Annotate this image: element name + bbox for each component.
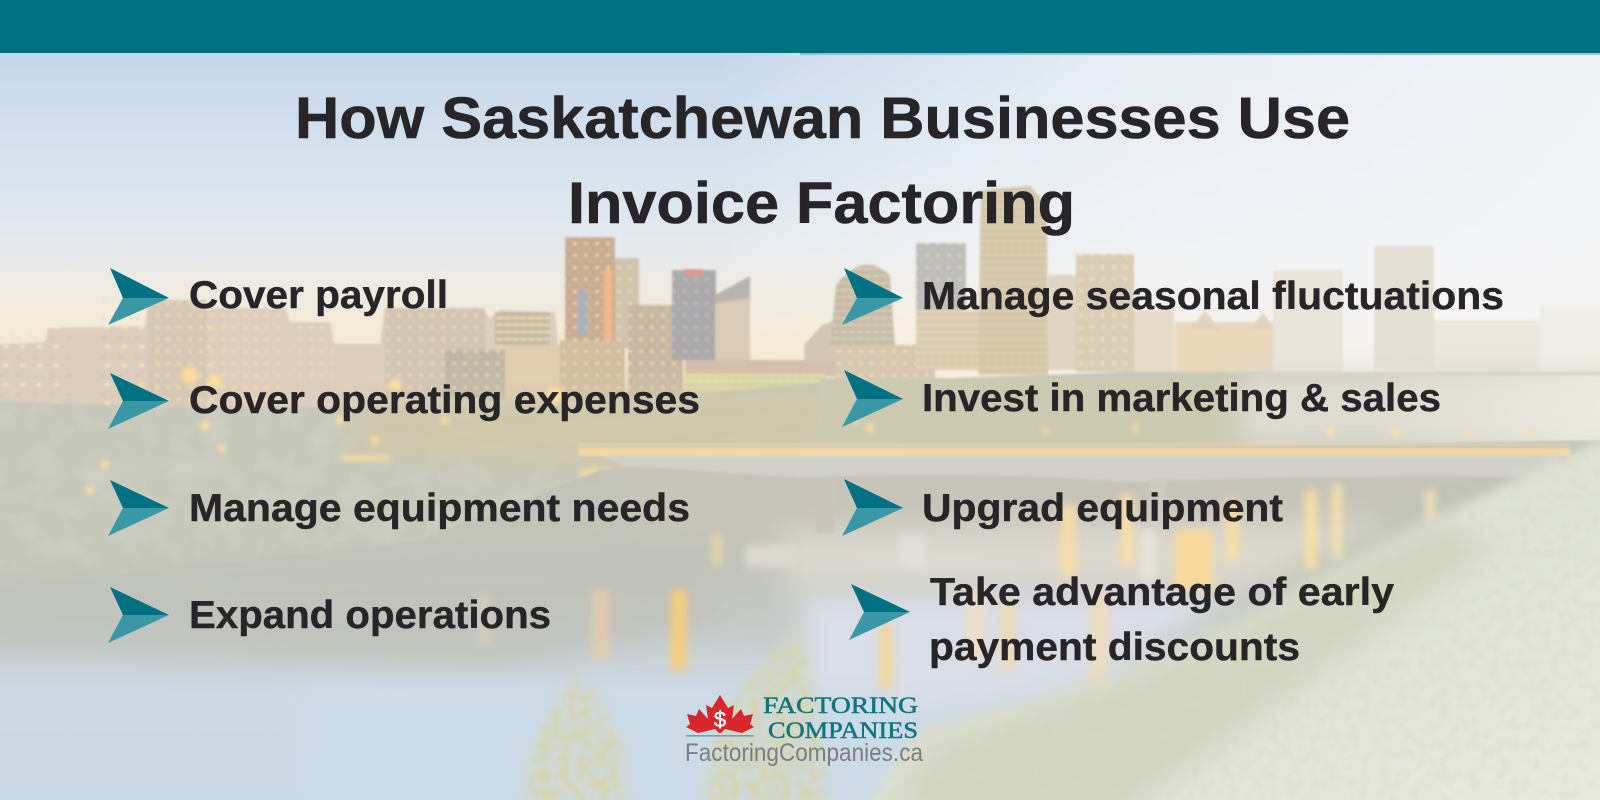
icon: red maple leaf with dollar sign: $ [714, 707, 726, 732]
skyline buildings [0, 186, 1600, 420]
river [0, 440, 1600, 800]
item: upgrade equipment: Upgrad equipment [922, 487, 1283, 530]
top teal bar [0, 0, 1600, 55]
arrow icon: manage equipment needs [108, 480, 169, 536]
bridge [578, 444, 1570, 533]
item: cover payroll: Cover payroll [189, 274, 448, 317]
item: expand operations: Expand operations [189, 594, 551, 637]
sky [0, 40, 1600, 410]
arrow icon: invest in marketing [842, 370, 903, 427]
arrow icon: upgrade equipment [842, 479, 903, 536]
item: early payment discounts: Take advantage of early [930, 571, 1394, 614]
foreground shrubs [516, 624, 834, 800]
grassy foreground bank [840, 430, 1600, 800]
arrow icon: cover payroll [108, 268, 169, 325]
item: early payment discounts [929, 571, 1394, 669]
item: early payment discounts: payment discounts [929, 626, 1300, 669]
arrow icon: expand operations [108, 587, 169, 643]
item: manage equipment needs: Manage equipment needs [189, 487, 690, 530]
item: cover operating expenses: Cover operating expenses [189, 379, 700, 422]
arrow icon: manage seasonal fluctuations [842, 268, 903, 325]
icon: red maple leaf with dollar sign [686, 695, 754, 737]
right column list [842, 268, 1504, 669]
item: invest in marketing and sales: Invest in marketing & sales [922, 377, 1441, 420]
title [295, 86, 1350, 236]
arrow icon: early payment discounts [849, 584, 910, 640]
logo wordmark [763, 693, 918, 743]
tree-covered riverbank [0, 372, 1600, 590]
title: How Saskatchewan Businesses Use [295, 86, 1350, 151]
left column list [108, 268, 700, 643]
logo: Factoring Companies [685, 693, 923, 767]
logo wordmark: FACTORING [763, 693, 918, 718]
street lights [86, 367, 1533, 494]
reflections on water [478, 485, 1435, 690]
title: Invoice Factoring [568, 171, 1075, 236]
logo wordmark: COMPANIES [768, 718, 918, 743]
logo url: FactoringCompanies.ca [685, 739, 923, 767]
item: manage seasonal fluctuations: Manage seasonal fluctuations [922, 275, 1504, 318]
arrow icon: cover operating expenses [108, 373, 169, 429]
